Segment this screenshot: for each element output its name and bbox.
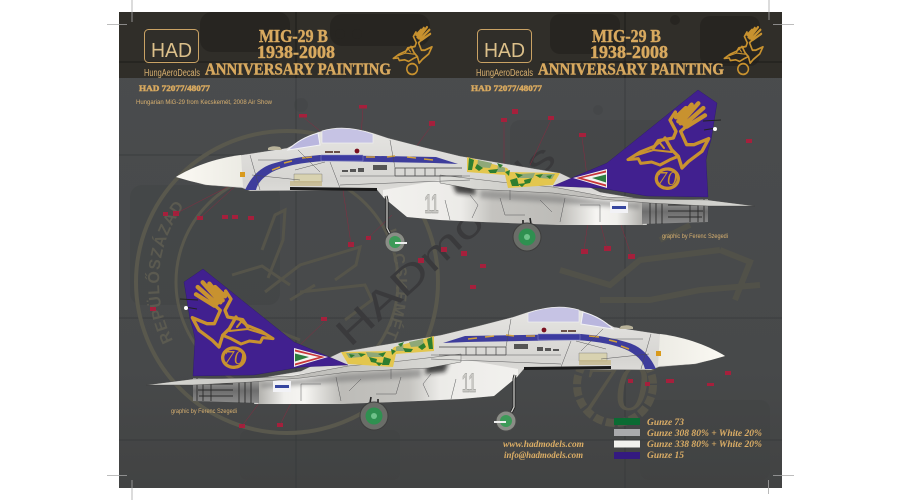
fin number 70, bottom: 70 xyxy=(224,347,244,369)
watermark: left squadron emblem xyxy=(134,129,440,435)
crop marks xyxy=(107,0,794,500)
decal sheet background xyxy=(119,12,782,488)
contact details: info@hadmodels.com xyxy=(504,450,583,461)
product code right: HAD 72077/48077 xyxy=(471,83,543,93)
left title: ANNIVERSARY PAINTING xyxy=(205,60,391,78)
paint legend: Gunze 15 xyxy=(647,450,684,461)
watermark: left squadron emblem: REPÜLŐSZÁZAD xyxy=(145,202,182,344)
watermark: HADmodels diagonal: HADmodels xyxy=(328,136,564,355)
watermark: right 70 laurel emblem xyxy=(560,225,760,425)
watermark: right 70 laurel emblem: 70 xyxy=(582,352,648,425)
red stencil markers xyxy=(150,105,752,428)
left logo: HAD: HungAeroDecals xyxy=(144,68,200,79)
aircraft: top side view xyxy=(176,90,755,252)
right logo: HAD: HungAeroDecals xyxy=(476,68,533,79)
paint legend: Gunze 338 80% + White 20% xyxy=(647,439,762,450)
product code left: HAD 72077/48077 xyxy=(139,83,211,93)
right title: MIG-29 B xyxy=(592,26,661,46)
right logo: HAD xyxy=(476,30,533,79)
header band xyxy=(119,12,782,78)
red stencil lines xyxy=(175,108,631,426)
paint legend: Gunze 73 xyxy=(647,417,684,428)
left title xyxy=(205,26,391,78)
fin number 70, top: 70 xyxy=(657,168,677,190)
right title: 1938-2008 xyxy=(590,42,668,62)
watermark: left squadron emblem: KECSKEMÉT xyxy=(387,228,407,340)
contact details xyxy=(503,439,584,461)
aircraft: bottom side view: 11 xyxy=(462,368,476,398)
aircraft: top side view: 11 xyxy=(424,189,438,219)
left logo: HAD: HAD xyxy=(151,40,192,62)
left title: 1938-2008 xyxy=(257,42,335,62)
aircraft: bottom side view xyxy=(146,269,725,431)
right eagle emblem xyxy=(724,27,763,74)
paint legend: Gunze 308 80% + White 20% xyxy=(647,428,762,439)
right title xyxy=(538,26,724,78)
contact details: www.hadmodels.com xyxy=(503,439,584,450)
left logo: HAD xyxy=(144,30,200,79)
left eagle emblem xyxy=(393,27,432,74)
right logo: HAD: HAD xyxy=(484,40,525,62)
left title: MIG-29 B xyxy=(259,26,328,46)
credit top: graphic by Ferenc Szegedi xyxy=(662,233,728,240)
right title: ANNIVERSARY PAINTING xyxy=(538,60,724,78)
paint legend xyxy=(614,417,762,461)
credit bottom: graphic by Ferenc Szegedi xyxy=(171,408,237,415)
subtitle: Hungarian MiG-29 from Kecskemét, 2008 Air Show xyxy=(136,99,273,106)
